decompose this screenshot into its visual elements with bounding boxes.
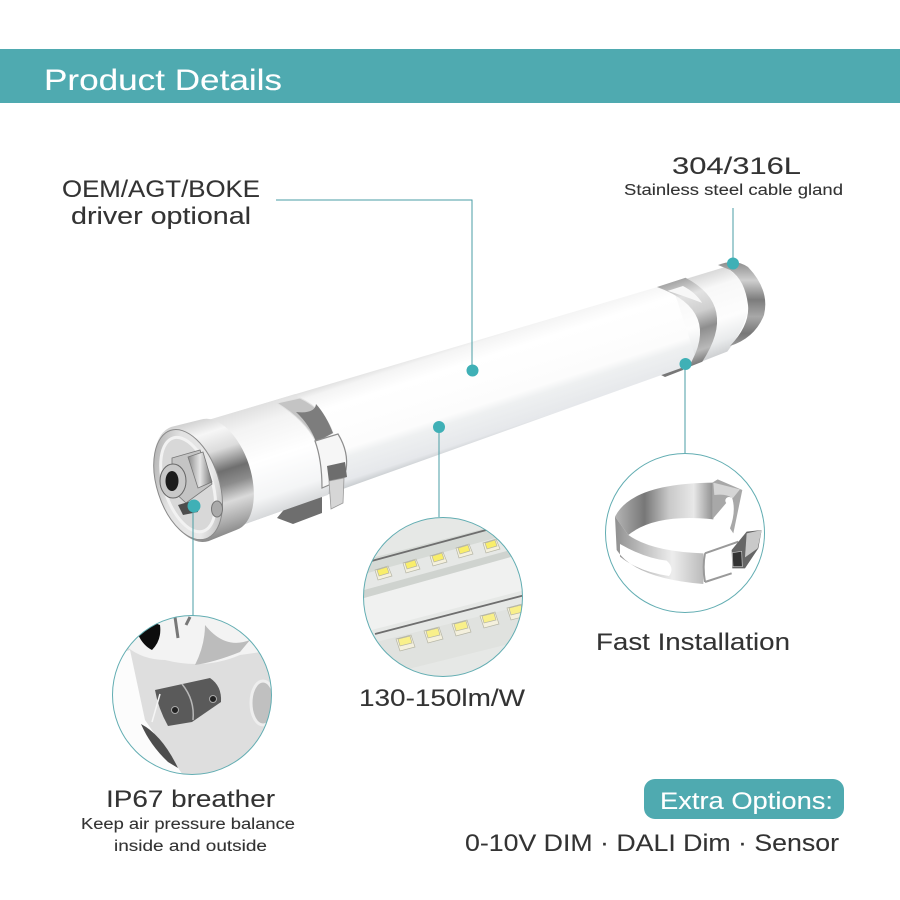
cable gland bbox=[160, 450, 212, 503]
end face bbox=[141, 421, 235, 548]
screw bbox=[212, 501, 222, 517]
LED label: 130-150lm/W bbox=[359, 685, 525, 712]
callout line: breather bbox=[192, 506, 194, 616]
mounting bracket left bbox=[277, 490, 322, 524]
callout line: cable gland bbox=[732, 208, 734, 263]
breather label bbox=[81, 786, 295, 855]
breather label: IP67 breather bbox=[106, 786, 275, 813]
tab bbox=[712, 479, 742, 533]
cable gland label: 304/316L bbox=[672, 153, 801, 180]
LED chips upper row bbox=[375, 539, 500, 580]
callout dots bbox=[188, 258, 739, 512]
breather label: inside and outside bbox=[114, 838, 267, 855]
steel ring left bbox=[140, 408, 268, 551]
callout line: LED bbox=[438, 427, 440, 517]
clamp slot bbox=[668, 282, 702, 312]
steel ring right bbox=[718, 262, 765, 346]
callout line: clamp bbox=[684, 364, 686, 455]
inset: breather detail bbox=[110, 613, 275, 778]
callout line: driver bbox=[276, 200, 472, 370]
heading: Product Details bbox=[44, 64, 282, 97]
extra options pill: Extra Options: bbox=[660, 788, 833, 815]
buckle bbox=[732, 530, 762, 568]
driver label: OEM/AGT/BOKE bbox=[62, 176, 260, 203]
driver label: driver optional bbox=[71, 203, 251, 230]
product: tube light bbox=[140, 245, 768, 551]
inset: LED detail bbox=[360, 515, 526, 680]
breather label: Keep air pressure balance bbox=[81, 816, 295, 833]
driver label bbox=[62, 176, 260, 230]
front band bbox=[615, 517, 703, 584]
options list: 0-10V DIM · DALI Dim · Sensor bbox=[465, 830, 839, 857]
LED chips lower row bbox=[396, 604, 526, 651]
opal end left bbox=[211, 389, 339, 524]
header band bbox=[0, 49, 900, 103]
extra options pill bbox=[644, 779, 844, 819]
fast installation label: Fast Installation bbox=[596, 629, 790, 656]
rear band bbox=[615, 483, 713, 535]
breather bbox=[178, 500, 198, 515]
wire loop bbox=[704, 542, 738, 582]
left clamp bbox=[277, 398, 347, 509]
inset: clamp bbox=[606, 454, 764, 612]
opal end right bbox=[672, 262, 763, 363]
steel clamp right bbox=[657, 272, 730, 369]
tube body bbox=[182, 249, 767, 534]
mounting bracket right bbox=[655, 350, 683, 377]
cable gland label bbox=[624, 153, 843, 199]
cable gland label: Stainless steel cable gland bbox=[624, 182, 843, 199]
